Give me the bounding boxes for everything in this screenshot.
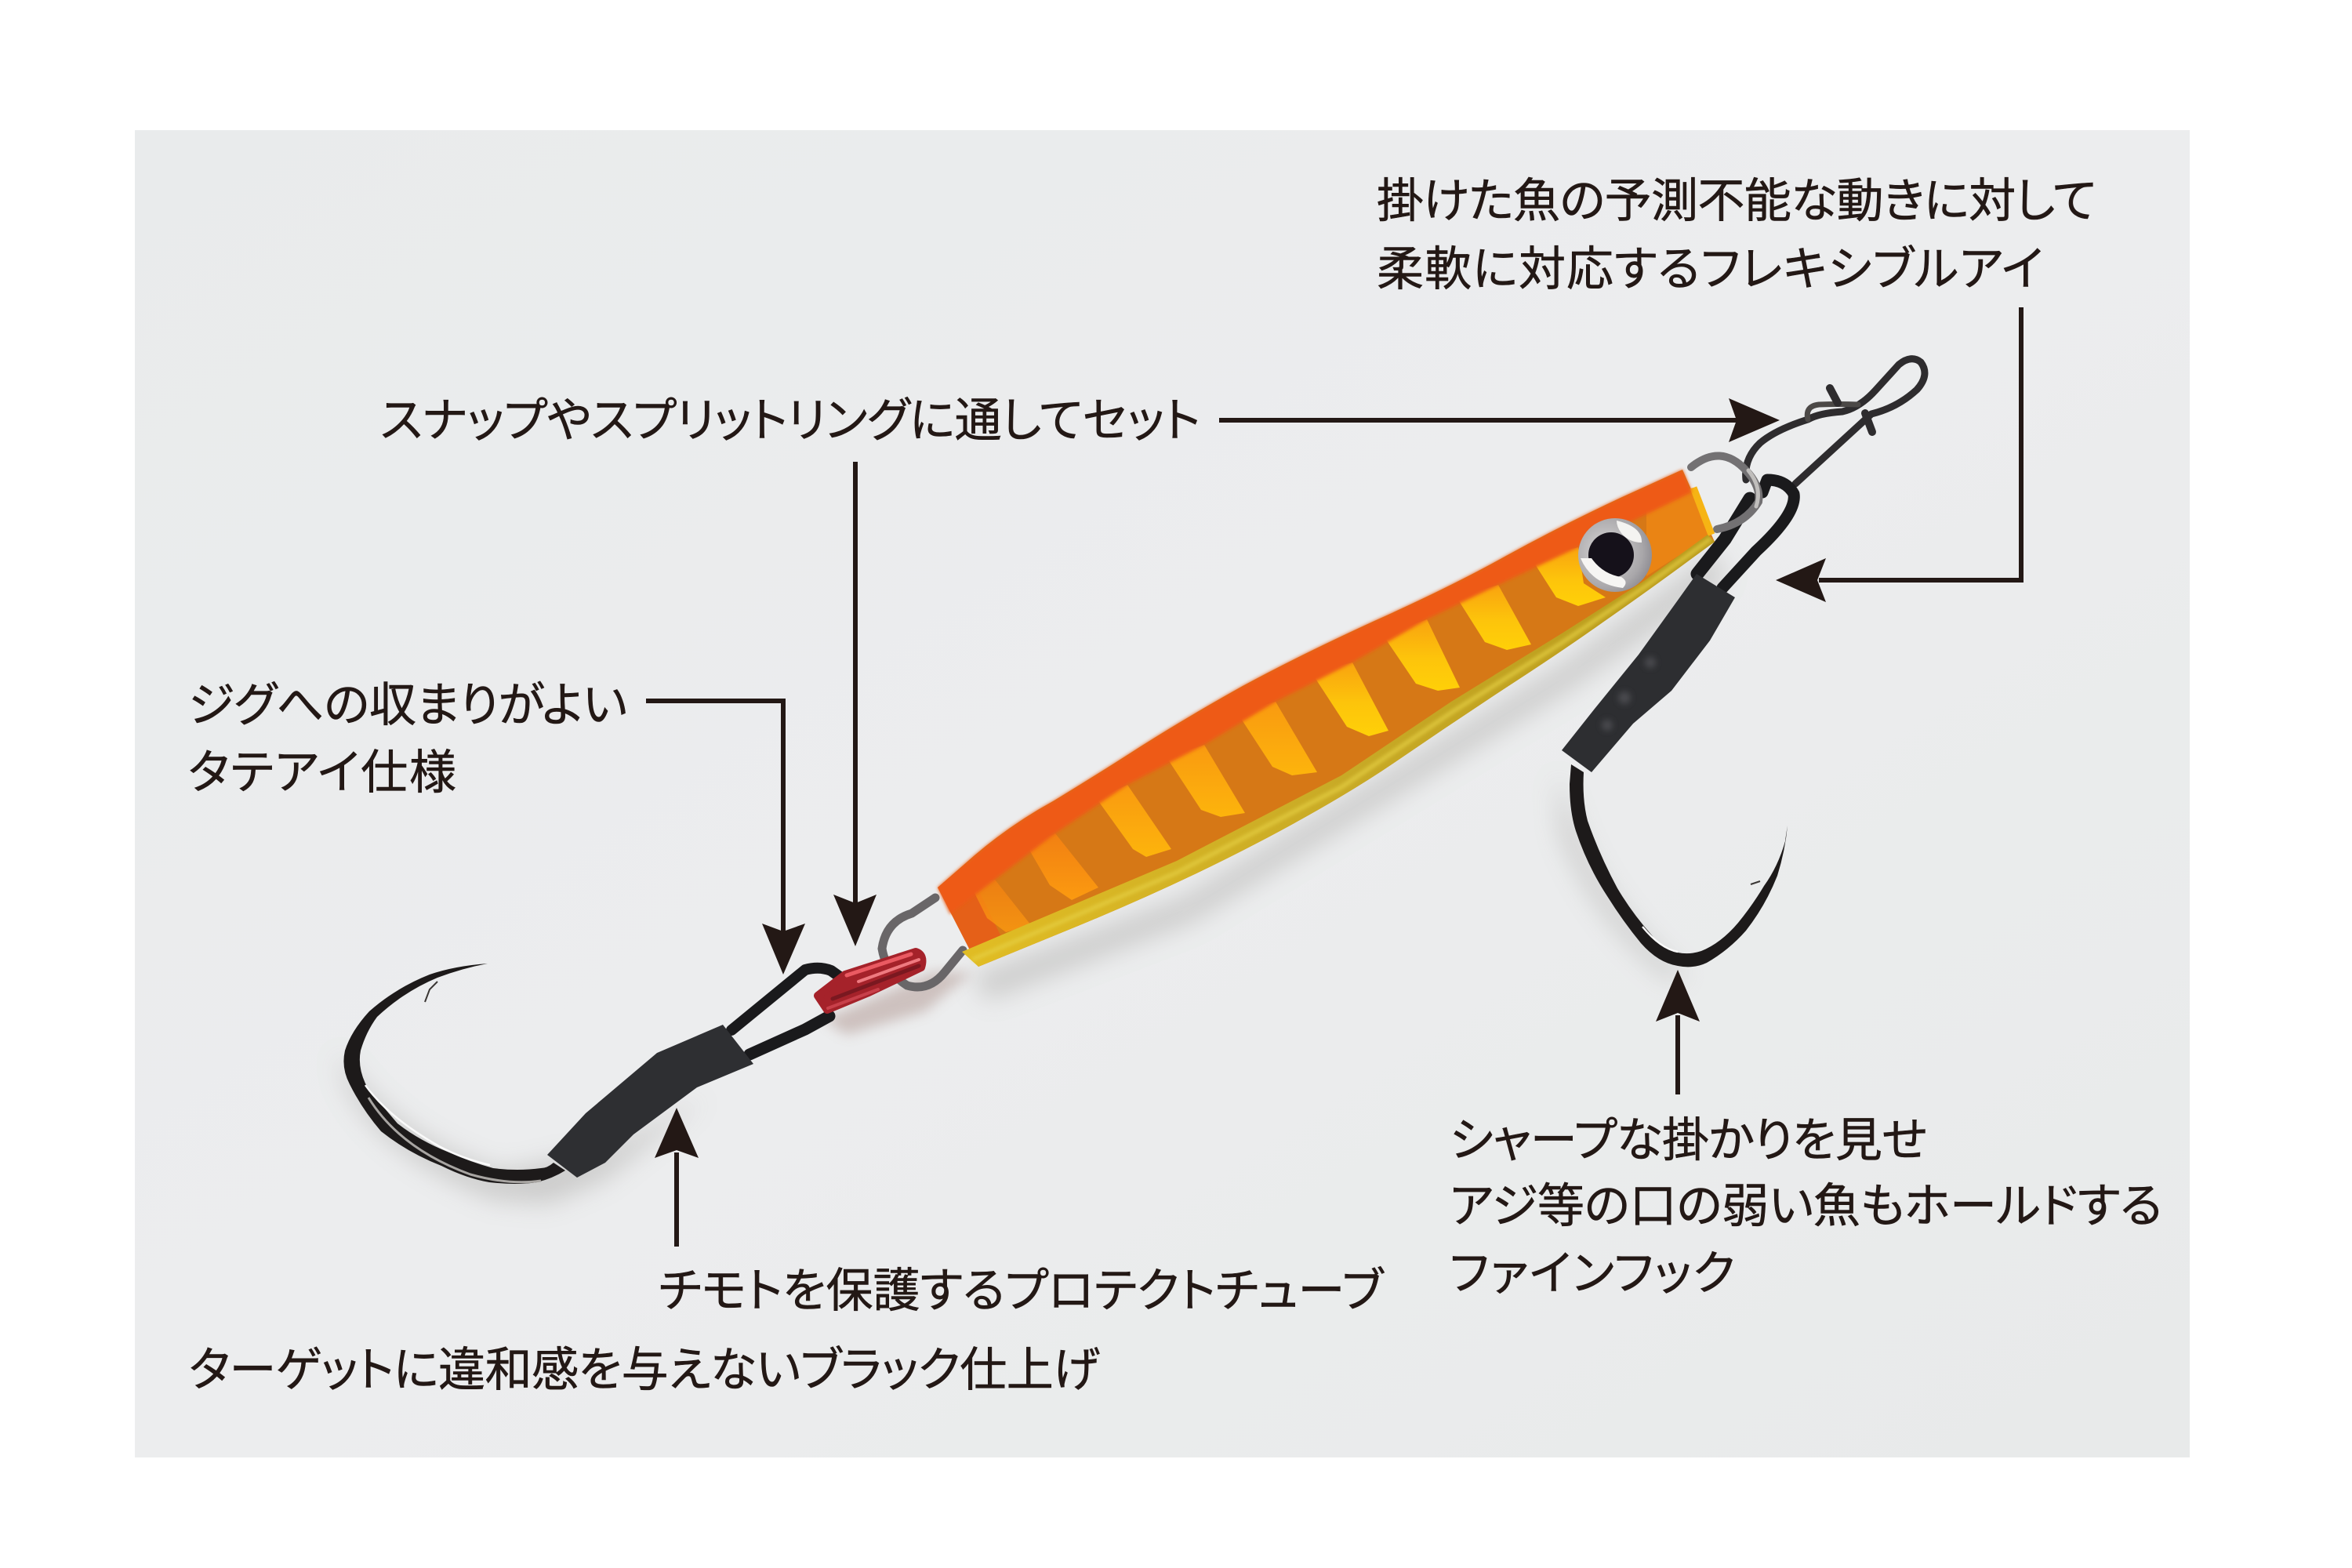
arrow: flexible eye <box>1776 307 2021 602</box>
snap swivel wire <box>1746 359 1925 484</box>
callout: flexible eye: 掛けた魚の予測不能な動きに対して <box>1377 175 2096 227</box>
callout: fine hook: アジ等の口の弱い魚もホールドする <box>1450 1180 2162 1232</box>
arrow: protective tube <box>655 1108 699 1247</box>
arrow: vertical eye <box>646 701 805 975</box>
callout: snap or split ring: スナップやスプリットリングに通してセット <box>380 394 1200 447</box>
callout: fine hook: シャープな掛かりを見せ <box>1450 1114 1927 1167</box>
callout: protective tube: チモトを保護するプロテクトチューブ <box>659 1265 1385 1317</box>
arrow: fine hook <box>1656 970 1700 1094</box>
left assist braid <box>731 968 842 1054</box>
red ring shadow <box>823 972 972 1035</box>
body base <box>938 470 1715 967</box>
callout: fine hook: ファインフック <box>1450 1247 1735 1300</box>
reflective stripes <box>971 547 1606 932</box>
jig lure photo illustration <box>337 359 1925 1203</box>
arrow: to snap <box>1219 398 1780 442</box>
arrow: to split ring <box>833 462 877 946</box>
gold belly <box>962 535 1715 967</box>
callout: black finish: ターゲットに違和感を与えないブラック仕上げ <box>189 1344 1100 1396</box>
callout: vertical eye <box>188 679 627 799</box>
protective tube: right <box>1562 574 1735 772</box>
callout: flexible eye <box>1377 175 2096 296</box>
callout: flexible eye: 柔軟に対応するフレキシブルアイ <box>1377 243 2043 296</box>
red-orange back band <box>938 470 1692 914</box>
callout: vertical eye: ジグへの収まりがよい <box>188 679 627 731</box>
left end cap <box>938 864 1005 967</box>
hook: right <box>1570 764 1788 967</box>
right split ring <box>1691 456 1759 529</box>
belly highlight <box>972 539 1711 960</box>
left split ring <box>882 898 963 987</box>
panel: photo background <box>135 130 2190 1457</box>
lure body <box>938 470 1715 967</box>
callout: fine hook <box>1450 1114 2162 1300</box>
protective tube: left <box>547 1025 753 1178</box>
head panel <box>1646 488 1711 576</box>
right assist braid <box>1697 480 1794 588</box>
red split ring <box>818 952 922 1010</box>
eye <box>1578 518 1652 592</box>
soft shadows <box>337 553 1725 1203</box>
callout: vertical eye: タテアイ仕様 <box>188 746 456 799</box>
hook: left <box>343 964 565 1184</box>
